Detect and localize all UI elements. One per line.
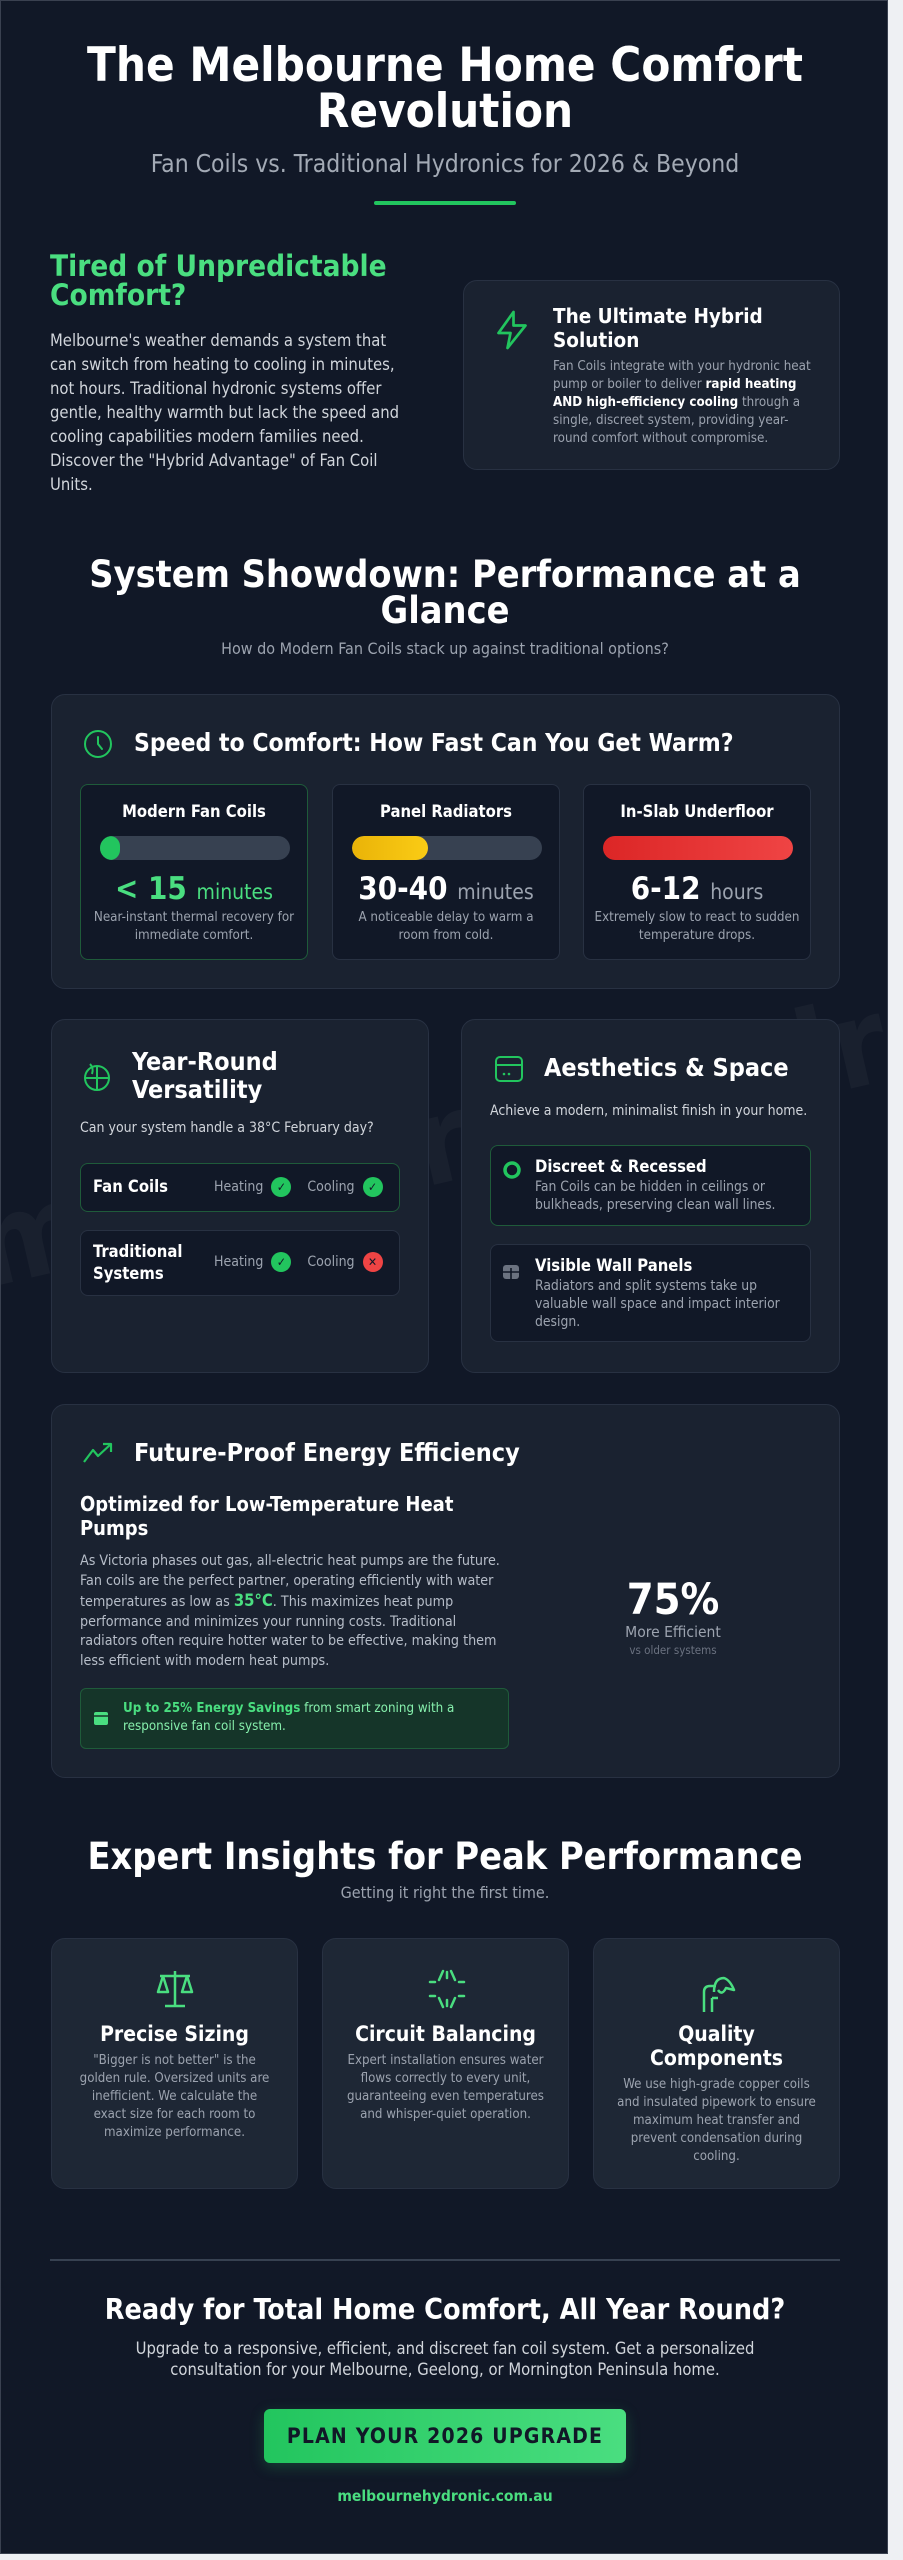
box: discreet: Discreet & Recessed bbox=[535, 1157, 707, 1176]
panel: speed to comfort bbox=[51, 694, 840, 989]
row: traditional: Heating Cooling bbox=[214, 1254, 355, 1270]
panel: year-round versatility bbox=[51, 1019, 429, 1373]
paragraph: As Victoria phases out gas, all-electric heat pumps are the future. Fan coils are the perfect partner, operating efficiently with water temperatures as low as 35°C. This maximizes heat pump performance and minimizes your running costs. Traditional radiators often require hotter water to be effective, making them less efficient with modern heat pumps. bbox=[80, 1553, 500, 1669]
icon: bolt bbox=[497, 310, 527, 350]
card: circuit balancing: Expert installation ensures water flows correctly to every unit, guaranteeing even temperatures and whisper-quiet operation. bbox=[347, 2053, 544, 2122]
panel heading: Future-Proof Energy Efficiency bbox=[134, 1438, 520, 1467]
row: traditional: Systems bbox=[93, 1264, 164, 1283]
row: fan coils: Fan Coils bbox=[93, 1177, 168, 1196]
stat: 75%: More Efficient bbox=[625, 1623, 721, 1641]
icon: balancing bbox=[428, 1970, 466, 2008]
row: traditional: Traditional bbox=[93, 1242, 182, 1261]
box: visible panels: Radiators and split systems take up valuable wall space and impact interior design. bbox=[535, 1278, 780, 1330]
row: traditional: ✓ bbox=[277, 1255, 286, 1269]
CTA text: Upgrade to a responsive, efficient, and discreet fan coil system. Get a personalized consultation for your Melbourne, Geelong, or Mornington Peninsula home. bbox=[136, 2339, 754, 2379]
card: precise sizing: Precise Sizing bbox=[100, 2022, 249, 2046]
title: Revolution bbox=[317, 84, 573, 139]
question: Can your system handle a 38°C February day? bbox=[80, 1120, 374, 1136]
section heading: showdown bbox=[89, 552, 801, 632]
row: fan coils: Heating Cooling bbox=[214, 1179, 355, 1195]
section heading: showdown: Glance bbox=[381, 588, 509, 632]
accent bar bbox=[374, 201, 516, 205]
callout: savings bbox=[80, 1688, 509, 1749]
card: panel radiators: 30-40 minutes bbox=[358, 871, 534, 907]
section subtitle: Getting it right the first time. bbox=[341, 1883, 549, 1902]
icon: pipe bbox=[702, 1976, 736, 2012]
row: traditional: ✕ bbox=[368, 1255, 377, 1269]
icon: globe bbox=[84, 1063, 110, 1091]
icon: scales bbox=[156, 1971, 194, 2008]
stat: 75%: vs older systems bbox=[629, 1643, 717, 1657]
card: panel radiators bbox=[332, 784, 560, 960]
intro heading: Tired of Unpredictable Comfort? bbox=[50, 249, 387, 312]
box: visible panels bbox=[490, 1244, 811, 1342]
card: quality components: Components bbox=[650, 2046, 783, 2070]
subheading: Optimized for Low-Temperature Heat Pumps bbox=[80, 1492, 453, 1540]
panel: aesthetics & space bbox=[461, 1019, 840, 1373]
url: melbournehydronic.com.au bbox=[337, 2487, 553, 2505]
card: precise sizing bbox=[51, 1938, 298, 2189]
row: traditional bbox=[80, 1230, 400, 1296]
section heading: expert insights: Expert Insights for Peak Performance bbox=[87, 1834, 803, 1878]
icon: panel unit bbox=[495, 1056, 523, 1082]
row: fan coils: ✓ bbox=[277, 1180, 286, 1194]
card: circuit balancing bbox=[322, 1938, 569, 2189]
card: precise sizing: "Bigger is not better" is the golden rule. Oversized units are inefficient. We calculate the exact size for each room to maximize performance. bbox=[80, 2053, 269, 2140]
card: circuit balancing: Circuit Balancing bbox=[355, 2022, 536, 2046]
card text: Fan Coils integrate with your hydronic heat pump or boiler to deliver rapid heating AND high-efficiency cooling through a single, discreet system, providing year-round comfort without compromise. bbox=[553, 359, 811, 446]
card: modern fan coils: < 15 minutes bbox=[115, 871, 273, 907]
subtitle: Fan Coils vs. Traditional Hydronics for 2026 & Beyond bbox=[151, 149, 739, 178]
card: modern fan coils: Modern Fan Coils bbox=[122, 802, 266, 821]
button bbox=[264, 2409, 626, 2463]
panel heading: Aesthetics & Space bbox=[544, 1053, 789, 1082]
box: discreet bbox=[490, 1145, 811, 1226]
intro paragraph: Melbourne's weather demands a system that can switch from heating to cooling in minutes, not hours. Traditional hydronic systems offer gentle, healthy warmth but lack the speed and cooling capabilities modern families need. Discover the "Hybrid Advantage" of Fan Coil Units. bbox=[50, 331, 399, 494]
row: fan coils: ✓ bbox=[368, 1180, 377, 1194]
row: fan coils bbox=[80, 1163, 400, 1212]
CTA heading: Ready for Total Home Comfort, All Year Round? bbox=[105, 2293, 785, 2326]
card: modern fan coils: Near-instant thermal recovery for immediate comfort. bbox=[94, 910, 294, 943]
card: in-slab underfloor: 6-12 hours bbox=[631, 871, 763, 907]
title: The Melbourne Home Comfort bbox=[87, 38, 803, 93]
panel heading bbox=[132, 1047, 278, 1104]
title bbox=[87, 38, 803, 139]
panel heading: Versatility bbox=[132, 1075, 262, 1104]
intro: Achieve a modern, minimalist finish in your home. bbox=[490, 1103, 807, 1119]
card: in-slab underfloor: In-Slab Underfloor bbox=[620, 802, 774, 821]
card heading: The Ultimate Hybrid Solution bbox=[553, 304, 763, 352]
panel: energy efficiency bbox=[51, 1404, 840, 1778]
card: hybrid solution bbox=[463, 280, 840, 470]
icon: trend bbox=[83, 1442, 112, 1463]
stat: 75%: 75% bbox=[627, 1575, 719, 1625]
box: visible panels: Visible Wall Panels bbox=[535, 1256, 692, 1275]
card: panel radiators: A noticeable delay to warm a room from cold. bbox=[358, 910, 534, 943]
panel heading: Year-Round bbox=[132, 1047, 278, 1076]
card: modern fan coils bbox=[80, 784, 308, 960]
box: discreet: Fan Coils can be hidden in ceilings or bulkheads, preserving clean wall lines. bbox=[535, 1179, 775, 1213]
section heading: showdown: System Showdown: Performance at a bbox=[89, 552, 801, 596]
card: in-slab underfloor bbox=[583, 784, 811, 960]
card: in-slab underfloor: Extremely slow to react to sudden temperature drops. bbox=[595, 910, 799, 943]
callout: savings: Up to 25% Energy Savings from smart zoning with a responsive fan coil system. bbox=[123, 1701, 454, 1734]
button: PLAN YOUR 2026 UPGRADE bbox=[287, 2424, 603, 2448]
card: quality components: We use high-grade copper coils and insulated pipework to ensure maximum heat transfer and prevent condensation during cooling. bbox=[617, 2077, 816, 2164]
icon: clock bbox=[84, 730, 112, 758]
card: quality components: Quality bbox=[678, 2022, 755, 2046]
section subtitle: How do Modern Fan Coils stack up against traditional options? bbox=[221, 639, 669, 658]
panel heading: Speed to Comfort: How Fast Can You Get Warm? bbox=[134, 728, 734, 757]
card: panel radiators: Panel Radiators bbox=[380, 802, 512, 821]
card: quality components bbox=[593, 1938, 840, 2189]
stat: 75% bbox=[625, 1575, 721, 1657]
